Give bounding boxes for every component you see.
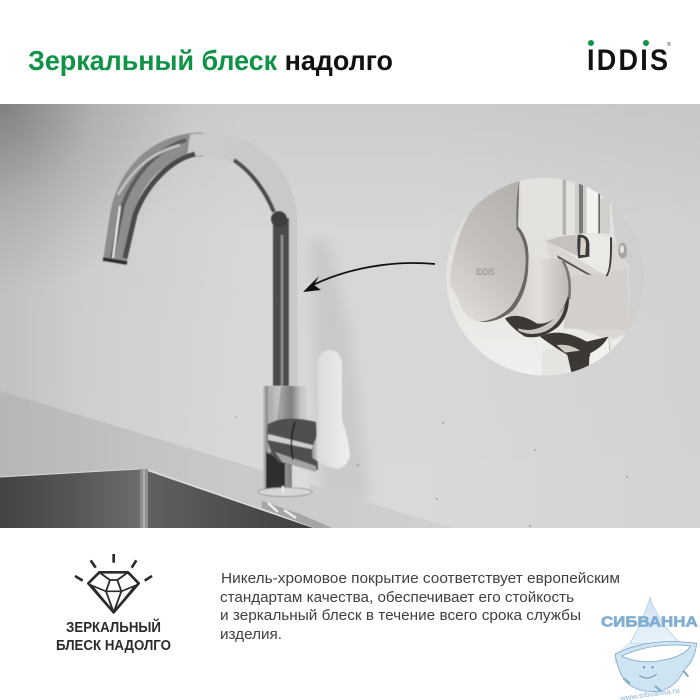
handle cylinder <box>507 258 570 324</box>
tub <box>615 641 697 692</box>
description text: и зеркальный блеск в течение всего срока службы <box>220 607 581 624</box>
watermark name: СИБВАННА <box>601 615 698 631</box>
logo: IDDIS: ® <box>667 41 671 48</box>
faucet spout <box>103 133 287 386</box>
rays <box>75 554 152 581</box>
watermark: Sibvanna <box>601 597 698 700</box>
faucet body <box>258 386 318 496</box>
arrow to detail <box>303 263 435 292</box>
description text <box>220 570 620 643</box>
description text: изделия. <box>220 626 282 643</box>
gem <box>88 572 139 612</box>
lever blade <box>449 180 529 322</box>
icon label <box>56 618 171 654</box>
wall <box>0 104 700 528</box>
title: Зеркальный блеск надолго <box>28 45 393 76</box>
photo: kitchen faucet scene <box>0 104 700 528</box>
description text: Никель-хромовое покрытие соответствует европейским <box>221 570 620 587</box>
faucet shadow on wall <box>310 240 368 505</box>
drop <box>630 597 680 643</box>
upper spout column <box>528 178 574 182</box>
description text: стандартам качества, обеспечивает его стойкость <box>220 589 574 606</box>
icon label: ЗЕРКАЛЬНЫЙ <box>66 618 161 636</box>
engraved logo: IDDIS <box>476 267 494 277</box>
icon: diamond <box>75 554 152 612</box>
sink basin <box>0 469 332 528</box>
countertop <box>0 391 453 528</box>
faucet <box>103 133 350 496</box>
clip tab <box>547 234 610 275</box>
icon label: БЛЕСК НАДОЛГО <box>56 638 171 654</box>
logo: IDDIS: IDDIS <box>587 44 668 77</box>
faucet lever <box>312 350 350 469</box>
wall specks <box>235 416 628 527</box>
right body <box>545 235 630 340</box>
lower stem <box>542 337 612 377</box>
detail circle: chrome close-up <box>446 178 627 376</box>
